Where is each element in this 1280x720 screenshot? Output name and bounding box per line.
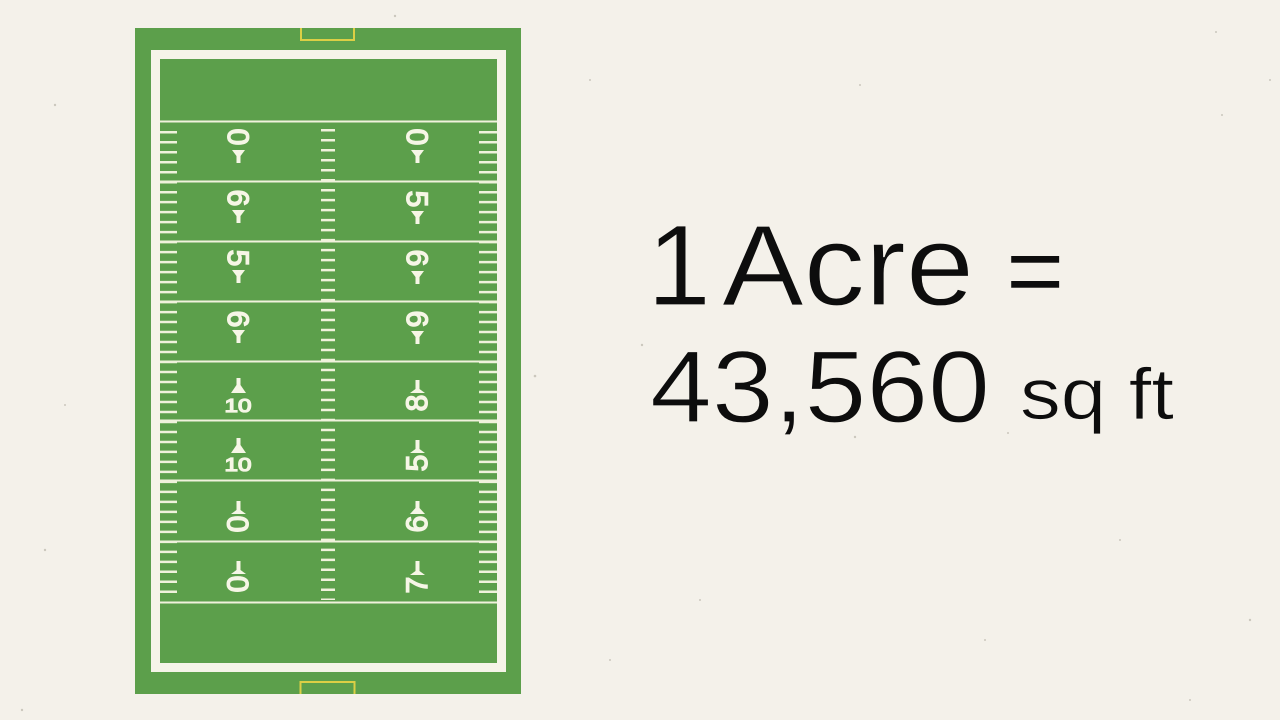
yard numbers left: 0 [222, 576, 255, 592]
yard numbers left: 10 [225, 395, 251, 416]
yard numbers right: 6 [400, 250, 433, 266]
yard numbers left: 10 [225, 454, 251, 475]
yard lines [160, 122, 497, 602]
yard numbers right: 6 [400, 311, 433, 327]
yard numbers left: 6 [221, 311, 254, 327]
field turf [135, 28, 521, 694]
bottom goal box [300, 682, 354, 694]
yard numbers right: 8 [401, 395, 434, 411]
yard numbers left: 6 [221, 190, 254, 206]
yard numbers right: 7 [401, 577, 434, 593]
yard numbers right: 0 [400, 129, 433, 145]
equation: 43,560 sq ft [650, 330, 1174, 444]
yard numbers right: 6 [401, 516, 434, 532]
football field [135, 28, 521, 694]
equation: 1 Acre = [647, 202, 1064, 330]
top goal box [301, 28, 354, 40]
field boundary [156, 54, 502, 668]
equals sign: = [1006, 215, 1064, 327]
yard numbers right: 5 [400, 191, 433, 207]
unit: sq ft [1020, 355, 1174, 435]
yard numbers right: 5 [401, 455, 434, 471]
yard numbers left: 0 [221, 129, 254, 145]
yard numbers left: 5 [221, 250, 254, 266]
value: 43,560 [650, 330, 990, 444]
hash marks [168, 129, 488, 600]
numeral one: 1 [647, 202, 711, 330]
direction arrows [231, 150, 425, 575]
word Acre: Acre [722, 202, 974, 330]
yard numbers left [221, 129, 255, 592]
yard numbers left: 0 [222, 516, 255, 532]
yard numbers right [400, 129, 434, 593]
